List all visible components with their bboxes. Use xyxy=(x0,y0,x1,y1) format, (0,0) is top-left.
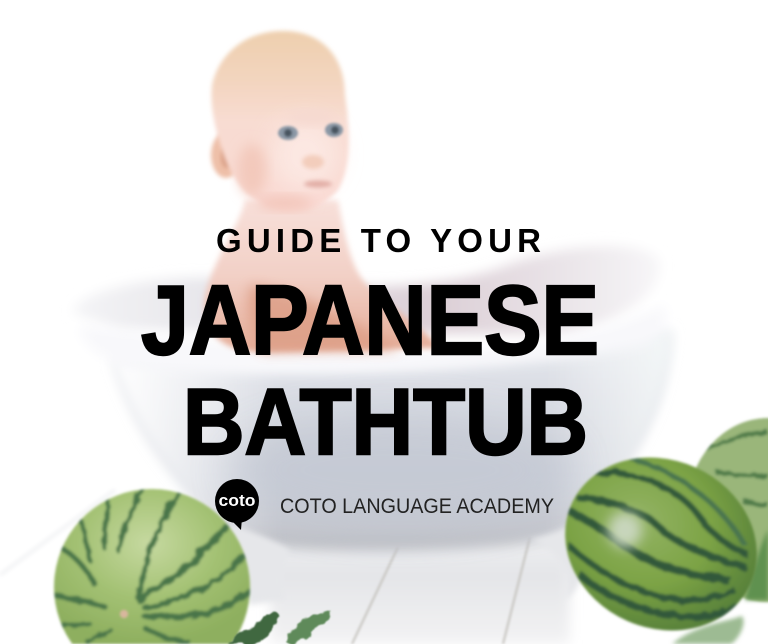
baby ear xyxy=(211,132,241,178)
logo: coto speech bubble: coto xyxy=(218,492,256,510)
baby head xyxy=(211,31,349,212)
watermelon: front left xyxy=(54,489,250,644)
watermelon blossom end xyxy=(120,610,128,618)
baby face shading xyxy=(271,119,339,191)
heading: bathtub: BATHTUB xyxy=(183,369,588,474)
tub shading xyxy=(230,415,570,525)
watermelon: back right xyxy=(687,418,768,602)
leaves bottom centre xyxy=(228,610,330,644)
brand name: COTO LANGUAGE ACADEMY xyxy=(280,495,554,518)
photo: bathtub xyxy=(72,246,672,605)
watermelon highlight xyxy=(608,512,642,548)
baby nose and mouth xyxy=(302,155,332,188)
watermelon: front right xyxy=(563,456,758,632)
baby arm shadow xyxy=(248,285,400,352)
heading: guide to your: GUIDE TO YOUR xyxy=(216,222,541,259)
tub body xyxy=(112,330,672,550)
floor xyxy=(0,490,570,644)
leaves right xyxy=(672,530,768,644)
baby brow shading xyxy=(284,111,336,125)
photo: baby xyxy=(204,31,440,352)
tub interior xyxy=(72,246,660,335)
tub rim xyxy=(80,305,666,374)
tub feet xyxy=(225,525,290,605)
logo: coto speech bubble xyxy=(215,479,259,530)
baby torso and arm xyxy=(204,200,440,352)
heading: japanese: JAPANESE xyxy=(141,265,599,375)
baby eyes xyxy=(278,123,343,140)
